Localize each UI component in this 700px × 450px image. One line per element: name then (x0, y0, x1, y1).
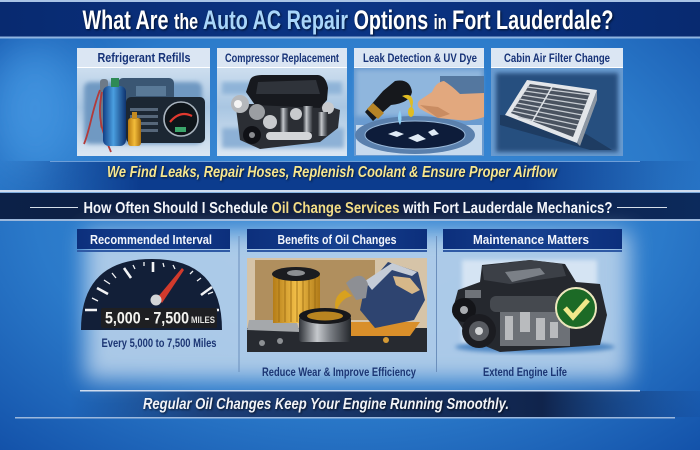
bottom banner text: Regular Oil Changes Keep Your Engine Running Smoothly. (143, 396, 509, 413)
divider left (238, 236, 240, 372)
heading: benefits of oil changes: Benefits of Oil Changes (278, 232, 396, 247)
gauge: 5,000 to 7,500 miles (81, 259, 222, 330)
caption: extend engine life: Extend Engine Life (483, 365, 567, 379)
title banner (0, 0, 700, 38)
heading: benefits of oil changes (247, 229, 427, 252)
panel: benefits of oil changes (247, 229, 427, 379)
heading: refrigerant refills: Refrigerant Refills (98, 51, 191, 65)
caption: reduce wear and improve efficiency: Reduce Wear & Improve Efficiency (262, 365, 416, 379)
panel: refrigerant refills (77, 48, 210, 156)
illustration: compressor engine (222, 75, 344, 149)
illustration: refrigerant tanks and gauge (84, 78, 205, 152)
heading: leak detection: Leak Detection & UV Dye (363, 51, 477, 65)
panel: cabin air filter change (491, 48, 623, 156)
heading: recommended interval (77, 229, 230, 252)
heading: maintenance matters (443, 229, 622, 252)
heading: compressor replacement: Compressor Replacement (225, 51, 339, 65)
illustration: engine with check badge (452, 260, 615, 353)
heading: cabin air filter: Cabin Air Filter Change (504, 51, 610, 65)
illustration: cabin air filter (496, 73, 618, 152)
gauge readout: MILES (191, 315, 215, 325)
left background glow (0, 45, 80, 175)
heading: maintenance matters: Maintenance Matters (473, 232, 589, 247)
title text: What Are the Auto AC Repair Options in Fort Lauderdale? (82, 5, 614, 35)
divider right (436, 236, 437, 372)
bottom banner (15, 390, 700, 418)
glow behind oil change panels (85, 232, 630, 380)
gauge readout: 5,000 - 7,500 (105, 308, 189, 328)
caption: every 5,000 to 7,500 miles: Every 5,000 to 7,500 Miles (102, 336, 217, 350)
illustration: dye bottle, hand and reservoir (355, 70, 484, 155)
icon: green check badge (556, 288, 596, 328)
illustration: oil filter, cap and jug (247, 258, 427, 352)
yellow tagline banner (0, 161, 700, 192)
panel: maintenance matters (443, 229, 622, 379)
panel: leak detection and UV dye (354, 48, 484, 156)
section heading banner: oil change (0, 193, 700, 221)
tagline text: We Find Leaks, Repair Hoses, Replenish Coolant & Ensure Proper Airflow (107, 164, 558, 181)
panel: compressor replacement (217, 48, 347, 156)
heading: recommended interval: Recommended Interval (90, 232, 212, 247)
section heading text: How Often Should I Schedule Oil Change Services with Fort Lauderdale Mechanics? (84, 200, 612, 217)
panel: recommended interval (77, 229, 230, 350)
